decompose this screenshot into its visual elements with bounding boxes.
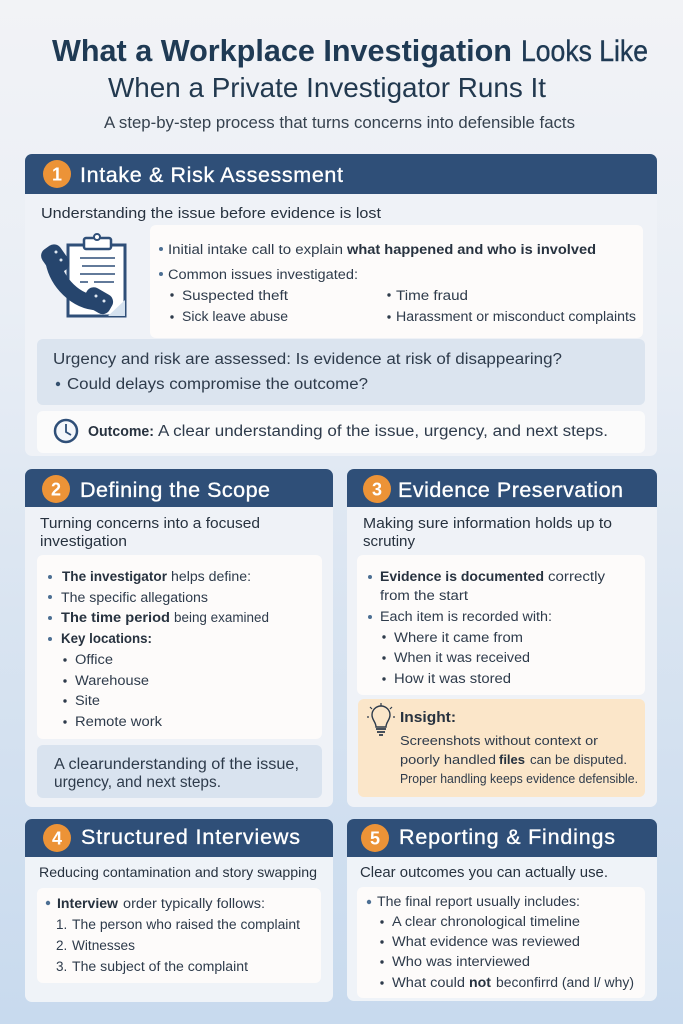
title block [52, 33, 648, 132]
report contents box [357, 887, 645, 998]
panel 3 tagline [363, 516, 612, 550]
icon: phone and clipboard [38, 234, 125, 317]
scope outcome box [37, 745, 322, 798]
scope details box: being examined [174, 610, 269, 625]
panel 2 tagline: investigation [40, 534, 127, 550]
scope details box: Remote work [75, 714, 162, 729]
interview order box: Witnesses [72, 938, 135, 953]
report contents box: What could [392, 975, 465, 990]
header 4: 4 [52, 828, 62, 848]
title line 2: When a Private Investigator Runs It [108, 72, 546, 103]
evidence details box: Where it came from [394, 630, 523, 645]
evidence details box [357, 555, 645, 695]
title line 1: What a Workplace Investigation [52, 33, 512, 68]
urgency and risk box [37, 339, 645, 405]
header 3: 3 [372, 480, 382, 500]
intake details box: Common issues investigated: [168, 267, 358, 282]
panel 4 tagline: Reducing contamination and story swapping [39, 864, 317, 880]
outcome box [37, 411, 645, 453]
panel 2 tagline: Turning concerns into a focused [40, 516, 260, 532]
evidence details box: Each item is recorded with: [380, 609, 552, 624]
panel 1 tagline: Understanding the issue before evidence is lost [41, 206, 381, 222]
icon: clock [55, 420, 77, 442]
insight callout: files [499, 752, 525, 767]
outcome box: A clear understanding of the issue, urgency, and next steps. [158, 423, 608, 440]
intake details box [150, 225, 643, 338]
header 4: Structured Interviews [81, 825, 300, 849]
insight callout: can be disputed. [530, 752, 627, 767]
header 3 [347, 469, 657, 507]
report contents box: beconfirrd (and l/ why) [496, 975, 634, 990]
scope details box: Key locations: [61, 631, 152, 646]
report contents box: What evidence was reviewed [392, 934, 580, 949]
interview order box: Interview [57, 896, 119, 911]
interview order box: 3. [56, 959, 67, 974]
panel 2 tagline [40, 516, 260, 550]
evidence details box: Evidence is documented [380, 569, 544, 584]
header 2: 2 [51, 480, 61, 500]
insight callout: Screenshots without context or [400, 733, 599, 748]
header 5 [347, 819, 657, 857]
title line 1: Looks Like [521, 35, 648, 68]
header 4 [25, 819, 333, 857]
panel 3: evidence preservation [347, 469, 657, 807]
interview order box [37, 888, 321, 983]
urgency and risk box: Could delays compromise the outcome? [67, 376, 368, 393]
evidence details box: How it was stored [394, 671, 511, 686]
interview order box: order typically follows: [123, 896, 265, 911]
header 3: Evidence Preservation [398, 478, 623, 502]
insight callout [358, 699, 645, 797]
report contents box: A clear chronological timeline [392, 914, 580, 929]
scope details box: Warehouse [75, 673, 149, 688]
outcome box: Outcome: [88, 424, 154, 440]
evidence details box: from the start [380, 588, 468, 603]
header 1: Intake & Risk Assessment [80, 163, 343, 187]
insight callout: Insight: [400, 709, 456, 726]
intake details box: Harassment or misconduct complaints [396, 309, 636, 324]
interview order box: 2. [56, 938, 67, 953]
report contents box: The final report usually includes: [377, 894, 580, 909]
urgency and risk box: Urgency and risk are assessed: Is evidence at risk of disappearing? [53, 351, 562, 368]
panel 5: reporting and findings [347, 819, 657, 1001]
insight callout: Proper handling keeps evidence defensible. [400, 771, 638, 786]
header 2 [25, 469, 333, 507]
header 5: 5 [370, 828, 380, 848]
panel 3 tagline: Making sure information holds up to [363, 516, 612, 532]
panel 2: defining the scope [25, 469, 333, 807]
evidence details box: correctly [548, 569, 605, 584]
scope outcome box: urgency, and next steps. [54, 774, 221, 791]
scope outcome box: A clearunderstanding of the issue, [54, 756, 299, 773]
scope details box: helps define: [171, 569, 251, 584]
header 2: Defining the Scope [80, 478, 270, 502]
intake details box: Suspected theft [182, 288, 288, 303]
scope details box: Office [75, 652, 113, 667]
scope details box: The time period [61, 610, 170, 625]
insight callout: poorly handled [400, 752, 496, 767]
interview order box: The subject of the complaint [72, 959, 248, 974]
report contents box: not [469, 975, 492, 990]
scope details box: The specific allegations [61, 590, 208, 605]
interview order box: The person who raised the complaint [72, 917, 300, 932]
interview order box: 1. [56, 917, 67, 932]
scope details box: Site [75, 693, 100, 708]
report contents box: Who was interviewed [392, 954, 530, 969]
scope details box [37, 555, 322, 739]
panel 5 tagline: Clear outcomes you can actually use. [360, 865, 608, 881]
intake details box: Initial intake call to explain [168, 242, 343, 257]
evidence details box: When it was received [394, 650, 530, 665]
intake details box: what happened and who is involved [346, 242, 596, 257]
panel 4: structured interviews [25, 819, 333, 1002]
header 5: Reporting & Findings [399, 825, 615, 849]
panel 3 tagline: scrutiny [363, 534, 416, 550]
panel 1: intake and risk assessment [25, 154, 657, 456]
intake details box: Sick leave abuse [182, 309, 288, 324]
scope details box: The investigator [62, 569, 168, 584]
subtitle: A step-by-step process that turns concerns into defensible facts [104, 114, 575, 132]
intake details box: Time fraud [396, 288, 468, 303]
header 1 [25, 154, 657, 194]
icon: light bulb [367, 703, 395, 735]
header 1: 1 [52, 164, 62, 184]
